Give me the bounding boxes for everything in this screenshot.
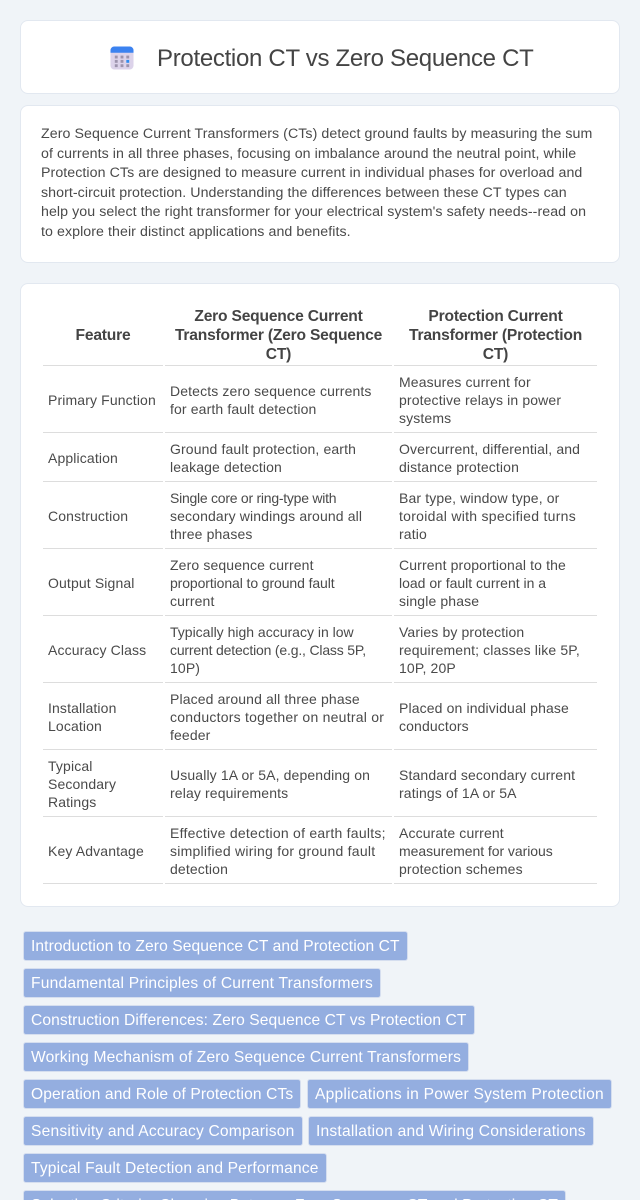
comparison table: 10P) — [170, 660, 200, 676]
comparison table: Placed on individual phase — [399, 700, 569, 716]
comparison table: Accuracy Class — [48, 642, 146, 658]
comparison table: Key Advantage — [48, 843, 144, 859]
topic chip: construction: Construction Differences: Zero Sequence CT vs Protection CT — [31, 1012, 466, 1029]
comparison table: three phases — [170, 526, 253, 542]
comparison table: relay requirements — [170, 785, 288, 801]
topic chip: operation — [23, 1079, 301, 1109]
topic chip: fault detection: Typical Fault Detection and Performance — [31, 1160, 319, 1177]
intro paragraph: of currents in all three phases, focusing on imbalance around the neutral point, while — [41, 146, 576, 162]
topic chip: sensitivity: Sensitivity and Accuracy Comparison — [31, 1123, 295, 1140]
topic chip: selection criteria — [23, 1190, 566, 1200]
comparison table: protection schemes — [399, 861, 523, 877]
comparison table: ratings of 1A or 5A — [399, 785, 517, 801]
comparison table: Single core or ring-type with — [170, 490, 336, 506]
comparison table: detection — [170, 861, 228, 877]
topic chip: applications — [307, 1079, 612, 1109]
comparison table: proportional to ground fault — [170, 575, 335, 591]
comparison table: Output Signal — [48, 575, 135, 591]
topic chip: introduction — [23, 931, 408, 961]
intro paragraph: Zero Sequence Current Transformers (CTs) detect ground faults by measuring the sum — [41, 126, 592, 142]
comparison table: Primary Function — [48, 392, 156, 408]
topic chip: fault detection — [23, 1153, 327, 1183]
panel: comparison table card — [20, 283, 620, 907]
comparison table: current — [170, 593, 214, 609]
topic chip: sensitivity — [23, 1116, 303, 1146]
panel: intro card — [20, 105, 620, 263]
topic chip: installation: Installation and Wiring Considerations — [316, 1123, 586, 1140]
comparison table: Location — [48, 718, 102, 734]
topic chip: construction — [23, 1005, 474, 1035]
comparison table: Typical — [48, 758, 92, 774]
comparison table: Ratings — [48, 794, 96, 810]
comparison table: Measures current for — [399, 374, 531, 390]
comparison table: Construction — [48, 508, 128, 524]
comparison table: Transformer (Protection — [409, 327, 582, 344]
comparison table: Placed around all three phase — [170, 691, 360, 707]
comparison table: simplified wiring for ground fault — [170, 843, 375, 859]
comparison table: Detects zero sequence currents — [170, 383, 372, 399]
comparison table: Varies by protection — [399, 624, 524, 640]
comparison table — [43, 308, 597, 884]
comparison table: Protection Current — [428, 308, 563, 325]
comparison table: distance protection — [399, 459, 519, 475]
comparison table: Zero Sequence Current — [194, 308, 363, 325]
comparison table: systems — [399, 410, 451, 426]
comparison table: Overcurrent, differential, and — [399, 441, 580, 457]
comparison table: leakage detection — [170, 459, 282, 475]
comparison table: Application — [48, 450, 118, 466]
panel: title card — [20, 20, 620, 94]
comparison table: Effective detection of earth faults; — [170, 825, 386, 841]
comparison table: secondary windings around all — [170, 508, 362, 524]
comparison table: Secondary — [48, 776, 116, 792]
comparison table: Transformer (Zero Sequence — [175, 327, 382, 344]
intro paragraph — [41, 126, 592, 240]
comparison table: Usually 1A or 5A, depending on — [170, 767, 370, 783]
comparison table: current detection (e.g., Class 5P, — [170, 642, 366, 658]
comparison table: conductors — [399, 718, 469, 734]
comparison table: feeder — [170, 727, 210, 743]
comparison table: measurement for various — [399, 843, 553, 859]
icon: calendar — [110, 46, 134, 70]
intro paragraph: help you select the right transformer for your electrical system's safety needs--read on — [41, 204, 586, 220]
comparison table: Standard secondary current — [399, 767, 575, 783]
comparison table: Typically high accuracy in low — [170, 624, 354, 640]
topic chip: installation — [308, 1116, 594, 1146]
comparison table: conductors together on neutral or — [170, 709, 384, 725]
comparison table: for earth fault detection — [170, 401, 316, 417]
comparison table: Ground fault protection, earth — [170, 441, 356, 457]
comparison table: Zero sequence current — [170, 557, 314, 573]
topic chip: working mechanism: Working Mechanism of Zero Sequence Current Transformers — [31, 1049, 461, 1066]
topic chip: fundamentals: Fundamental Principles of Current Transformers — [31, 975, 373, 992]
intro paragraph: short-circuit protection. Understanding the differences between these CT types can — [41, 184, 567, 200]
topic chip: fundamentals — [23, 968, 381, 998]
comparison table: protective relays in power — [399, 392, 561, 408]
title: Protection CT vs Zero Sequence CT — [157, 45, 534, 72]
comparison table: Installation — [48, 700, 116, 716]
comparison table: CT) — [266, 346, 291, 363]
comparison table: Bar type, window type, or — [399, 490, 559, 506]
topic chip: working mechanism — [23, 1042, 469, 1072]
comparison table: requirement; classes like 5P, — [399, 642, 580, 658]
topic chip: introduction: Introduction to Zero Sequence CT and Protection CT — [31, 938, 400, 955]
comparison table: single phase — [399, 593, 479, 609]
comparison table: 10P, 20P — [399, 660, 456, 676]
topic chip: operation: Operation and Role of Protection CTs — [31, 1086, 293, 1103]
intro paragraph: to explore their distinct applications and benefits. — [41, 224, 351, 240]
topic chip: applications: Applications in Power System Protection — [315, 1086, 604, 1103]
comparison table: load or fault current in a — [399, 575, 546, 591]
comparison table: Feature — [76, 327, 130, 344]
comparison table: CT) — [483, 346, 508, 363]
comparison table: Current proportional to the — [399, 557, 566, 573]
comparison table: Accurate current — [399, 825, 504, 841]
intro paragraph: Protection CTs are designed to measure current in individual phases for overload and — [41, 165, 582, 181]
comparison table: ratio — [399, 526, 427, 542]
comparison table: toroidal with specified turns — [399, 508, 576, 524]
